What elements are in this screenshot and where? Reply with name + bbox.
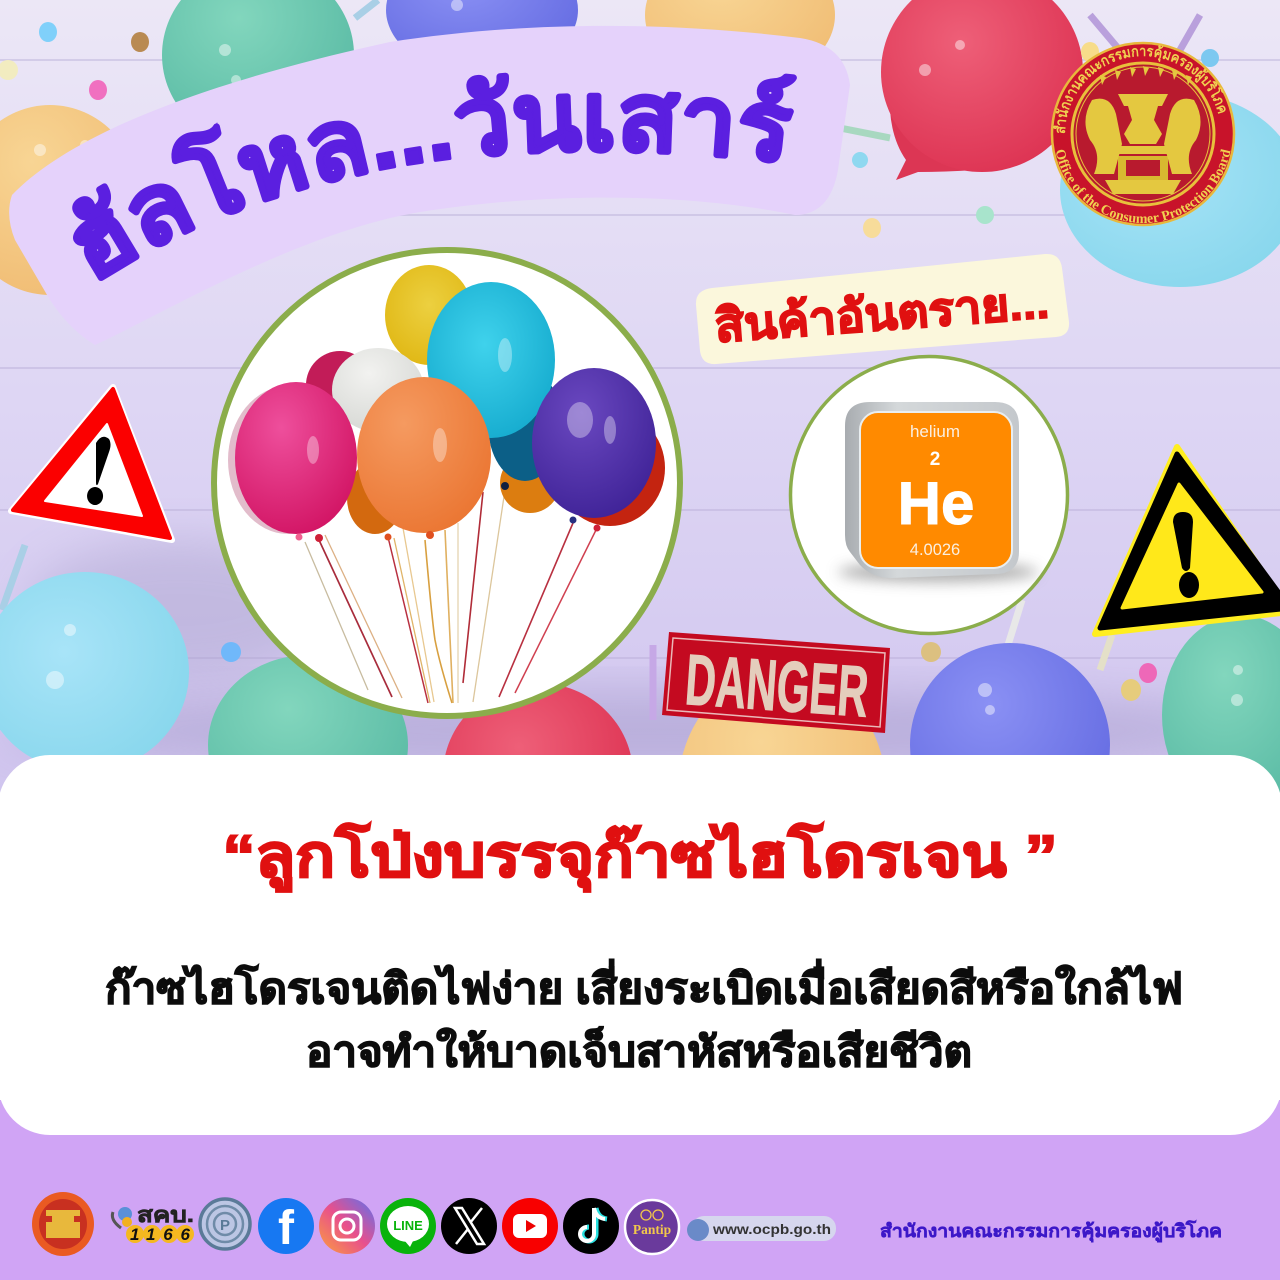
icon: CP logo: [200, 1199, 250, 1249]
icon: hotline 1166: สคบ.: [137, 1204, 194, 1227]
helium tile: [845, 402, 1019, 578]
panel body text: ก๊าซไฮโดรเจนติดไฟง่าย เสี่ยงระเบิดเมื่อเสียดสีหรือใกล้ไฟ: [105, 959, 1183, 1012]
exclamation mark: [1173, 512, 1193, 571]
danger stamp: DANGER: [683, 640, 871, 733]
seal emblem: [1085, 66, 1201, 194]
panel body text: อาจทำให้บาดเจ็บสาหัสหรือเสียชีวิต: [306, 1026, 972, 1075]
icon: CP logo: P: [220, 1217, 230, 1234]
balloon bunch photo circle: [214, 250, 680, 716]
icon: website pill: [687, 1216, 836, 1241]
icon: youtube: [502, 1198, 558, 1254]
icon: tiktok: [563, 1198, 619, 1254]
icon: website pill: www.ocpb.go.th: [712, 1221, 831, 1237]
helium tile: helium: [910, 422, 960, 441]
background: lilac wooden planks: [0, 0, 1280, 1000]
helium element circle: [790, 356, 1068, 634]
footer icons row: [32, 1192, 836, 1256]
panel body text: [105, 959, 1183, 1075]
warning tag text: สินค้าอันตราย...: [713, 276, 1051, 352]
footer band: [0, 1100, 1280, 1280]
icon: x: [441, 1198, 497, 1254]
balloon strings: [305, 490, 597, 703]
icon: facebook: f: [278, 1202, 295, 1255]
icon: facebook: [258, 1198, 314, 1255]
exclamation mark: [87, 437, 110, 505]
helium shadow: [838, 562, 1038, 582]
helium tile: He: [898, 470, 974, 537]
icon: instagram: [319, 1198, 375, 1254]
icon: line: [380, 1198, 436, 1254]
danger stamp: [662, 632, 890, 733]
background party balloons: [0, 0, 1280, 910]
balloons: [228, 265, 665, 542]
warning sign: yellow triangle: [1095, 447, 1280, 634]
warning tag: [696, 254, 1069, 364]
warning sign: red triangle: [11, 387, 172, 540]
helium tile: 4.0026: [910, 541, 960, 559]
icon: line: LINE: [393, 1218, 423, 1233]
confetti dots: [0, 22, 1219, 701]
OCPB seal logo: [1050, 42, 1236, 226]
party candles: [2, 0, 1200, 720]
title banner: [9, 26, 850, 304]
title text: ฮัลโหล...วันเสาร์: [72, 72, 797, 281]
OCPB seal logo: สำนักงานคณะกรรมการคุ้มครองผู้บริโภค: [1053, 45, 1226, 134]
footer organisation name: สำนักงานคณะกรรมการคุ้มครองผู้บริโภค: [880, 1220, 1222, 1243]
icon: hotline 1166: 1166: [130, 1225, 191, 1244]
panel heading: “ลูกโป่งบรรจุก๊าซไฮโดรเจน ”: [222, 821, 1058, 893]
icon: hotline 1166: [112, 1204, 194, 1244]
icon: pantip: Pantip: [633, 1222, 671, 1237]
helium tile: 2: [930, 449, 940, 470]
white info panel: [0, 755, 1280, 1135]
icon: pantip: [625, 1200, 679, 1254]
icon: OCPB seal small: [32, 1192, 94, 1256]
OCPB seal logo: Office of the Consumer Protection Board: [1056, 149, 1230, 223]
